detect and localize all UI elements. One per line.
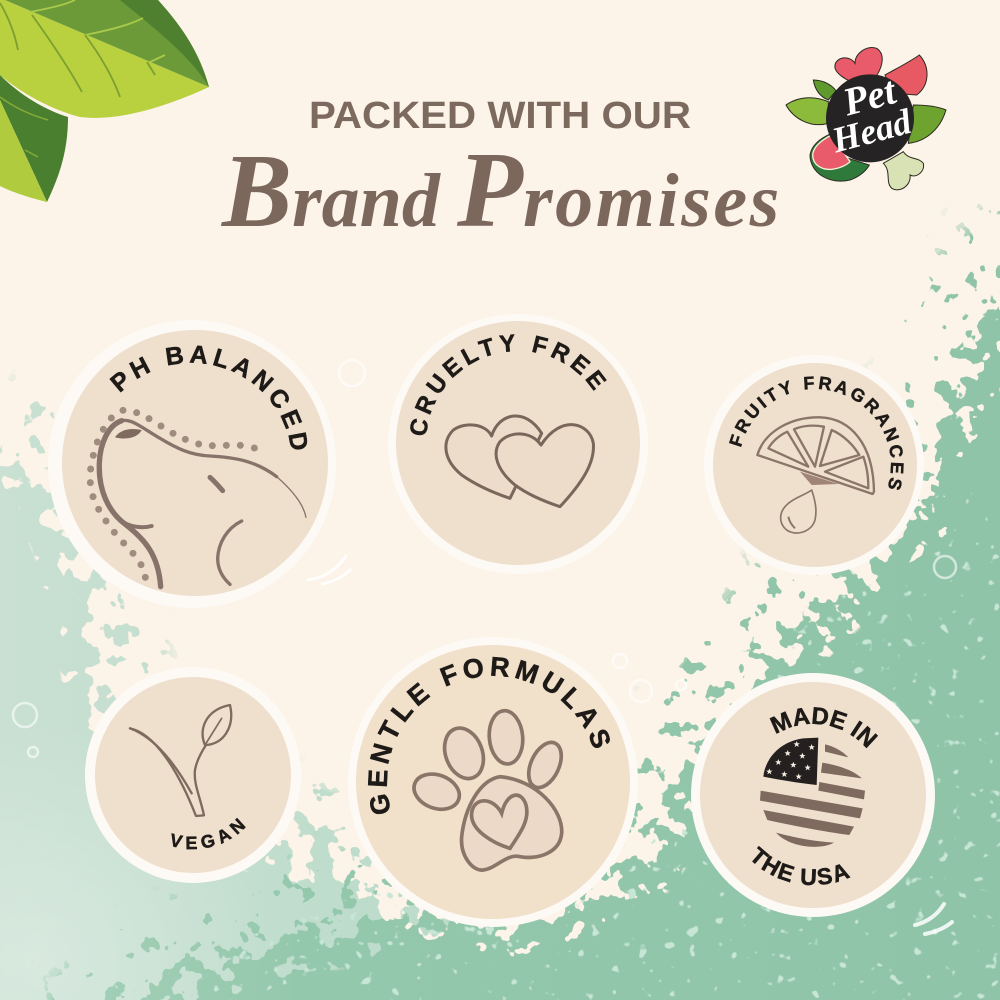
title: packed with our: PACKED WITH OUR: [309, 95, 691, 137]
title: brand promises: rand: [292, 159, 441, 243]
icon: paw with heart: [409, 709, 568, 870]
logo wordmark: Pet: [837, 68, 901, 125]
logo wordmark: Head: [827, 101, 916, 161]
icon: two hearts: [446, 416, 593, 507]
label: gentle formulas: GENTLE FORMULAS: [368, 656, 610, 814]
badge: made in the usa: [691, 673, 935, 917]
decorative leaves: [0, 0, 209, 202]
badge: vegan: [85, 667, 301, 883]
logo: pet head: [786, 48, 946, 190]
badge: fruity fragrances: [704, 355, 924, 575]
label: fruity fragrances: FRUITY FRAGRANCES: [728, 376, 904, 490]
icon: sprout: [130, 705, 231, 816]
badge: gentle formulas: [348, 637, 638, 927]
title: brand promises: romises: [523, 159, 782, 243]
label: the usa: THE USA: [752, 846, 850, 886]
label: ph balanced: PH BALANCED: [109, 346, 308, 450]
title: brand promises: B: [221, 132, 292, 249]
icon: dog profile: [87, 407, 306, 587]
label: made in: MADE IN: [770, 707, 878, 748]
badge: cruelty free: [388, 314, 648, 574]
logo wordmark: [818, 66, 916, 161]
label: vegan: VEGAN: [171, 818, 246, 850]
badge: ph balanced: [48, 320, 336, 608]
label: cruelty free: CRUELTY FREE: [410, 334, 607, 436]
title: brand promises: P: [456, 131, 524, 250]
background: green paint splatter: [0, 204, 1000, 1000]
icon: citrus slice and drop: [757, 417, 874, 533]
icon: us flag globe: [760, 738, 865, 847]
